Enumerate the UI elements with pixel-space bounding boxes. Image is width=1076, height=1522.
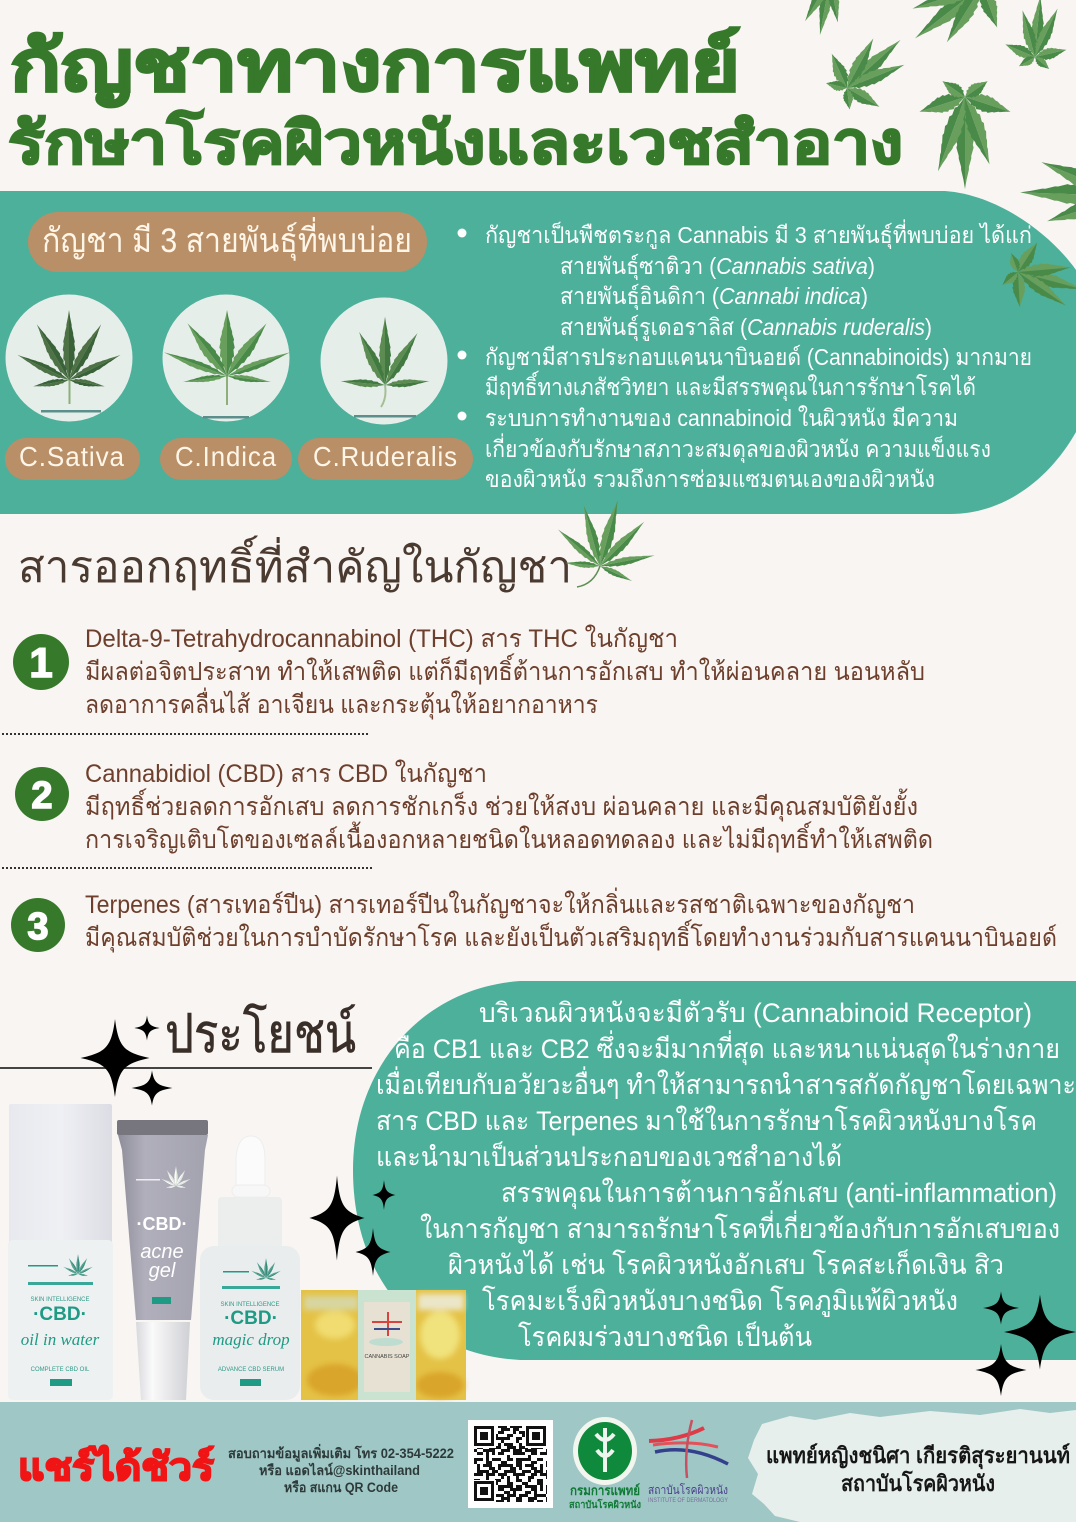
logo: department of medical services [569, 1417, 641, 1511]
product: oil in water bottle: COMPLETE CBD OIL [31, 1367, 90, 1373]
logo: institute of dermatology [648, 1420, 728, 1504]
product: acne gel tube: acne [140, 1241, 184, 1263]
THC text: ลดอาการคลื่นไส้ อาเจียน และกระตุ้นให้อยากอาหาร [85, 687, 598, 720]
product: cannabis soap [301, 1290, 466, 1400]
product: acne gel tube [117, 1120, 208, 1400]
CBD text: Cannabidiol (CBD) สาร CBD ในกัญชา [85, 759, 487, 788]
contact info: หรือ สแกน QR Code [284, 1480, 398, 1495]
bullet list: สายพันธุ์อินดิกา (Cannabi indica) [560, 283, 868, 310]
benefits text: โรคมะเร็งผิวหนังบางชนิด โรคภูมิแพ้ผิวหนัง [482, 1283, 958, 1317]
product: cannabis soap: CANNABIS SOAP [365, 1354, 410, 1360]
leaf on panel [994, 234, 1076, 324]
CBD text: การเจริญเติบโตของเซลล์เนื้องอกหลายชนิดในหลอดทดลอง และไม่มีฤทธิ์ทำให้เสพติด [85, 821, 933, 854]
bullet list: สายพันธุ์ซาติวา (Cannabis sativa) [560, 253, 875, 280]
benefits text: โรคผมร่วงบางชนิด เป็นต้น [518, 1319, 812, 1352]
bullet list: เกี่ยวข้องกับรักษาสภาวะสมดุลของผิวหนัง ความแข็งแรง [485, 433, 991, 463]
sparkles: lower right [976, 1292, 1076, 1396]
author credit [766, 1443, 1070, 1496]
item 3: Terpenes [11, 887, 1057, 953]
benefits text: ผิวหนังได้ เช่น โรคผิวหนังอักเสบ โรคสะเก็ดเงิน สิว [448, 1247, 1004, 1280]
Terpenes text: Terpenes (สารเทอร์ปีน) สารเทอร์ปีนในกัญชาจะให้กลิ่นและรสชาติเฉพาะของกัญชา [85, 887, 915, 919]
product: magic drop bottle [200, 1136, 300, 1400]
product: magic drop bottle: SKIN INTELLIGENCE [220, 1302, 280, 1308]
species: sativa: C.Sativa [19, 441, 125, 472]
product: magic drop bottle: ·CBD· [224, 1308, 278, 1329]
contact info: หรือ แอดไลน์@skinthailand [259, 1462, 420, 1478]
product: oil in water bottle: ·CBD· [33, 1304, 87, 1325]
heading: active compounds: สารออกฤทธิ์ที่สำคัญในกัญชา [18, 535, 572, 592]
CBD text [85, 759, 933, 854]
THC text [85, 624, 925, 720]
number badge 3: 3 [27, 906, 49, 948]
contact info [228, 1443, 454, 1495]
products [8, 1104, 466, 1400]
benefits text: สรรพคุณในการต้านการอักเสบ (anti-inflammation) [501, 1177, 1057, 1210]
species: indica [160, 294, 292, 480]
product: acne gel tube: ·CBD· [136, 1214, 188, 1234]
THC text: Delta-9-Tetrahydrocannabinol (THC) สาร THC ในกัญชา [85, 624, 678, 653]
product: acne gel tube: gel [149, 1260, 176, 1282]
logo: department of medical services: สถาบันโรคผิวหนัง [569, 1498, 641, 1511]
bullet list: กัญชามีสารประกอบแคนนาบินอยด์ (Cannabinoids) มากมาย [485, 344, 1032, 370]
species heading pill: กัญชา มี 3 สายพันธุ์ที่พบบ่อย [42, 217, 412, 261]
species heading pill [28, 212, 427, 272]
benefits panel background [353, 981, 1076, 1360]
panel: benefits text [353, 981, 1076, 1360]
bullet list [458, 219, 1032, 492]
benefits text: และนำมาเป็นส่วนประกอบของเวชสำอางได้ [376, 1139, 842, 1172]
share slogan: แชร์ได้ชัวร์ [18, 1445, 215, 1489]
product: oil in water bottle [8, 1104, 113, 1400]
species: indica: C.Indica [175, 441, 277, 472]
benefits text: บริเวณผิวหนังจะมีตัวรับ (Cannabinoid Receptor) [479, 998, 1032, 1028]
heading: benefits: ประโยชน์ [165, 1003, 356, 1064]
title line 1: กัญชาทางการแพทย์ [10, 27, 740, 108]
brush stroke panel [748, 1409, 1076, 1522]
product: magic drop bottle: ADVANCE CBD SERUM [218, 1367, 284, 1373]
number badge 1: 1 [29, 639, 53, 686]
logo: institute of dermatology: สถาบันโรคผิวหนัง [648, 1483, 728, 1497]
species: sativa [5, 294, 140, 480]
author credit: สถาบันโรคผิวหนัง [841, 1470, 995, 1496]
product: oil in water bottle: SKIN INTELLIGENCE [30, 1297, 90, 1303]
sparkles: middle [309, 1176, 395, 1276]
item 2: CBD [15, 759, 933, 854]
number badge 3 [11, 898, 65, 952]
contact info: สอบถามข้อมูลเพิ่มเติม โทร 02-354-5222 [228, 1443, 454, 1462]
logo: institute of dermatology: INSTITUTE OF DERMATOLOGY [648, 1498, 728, 1504]
bullet list: มีฤทธิ์ทางเภสัชวิทยา และมีสรรพคุณในการรักษาโรคได้ [485, 370, 976, 401]
item 1: THC [13, 624, 925, 720]
footer band [0, 1402, 1076, 1522]
panel: species [0, 191, 1076, 514]
number badge 2: 2 [31, 775, 53, 817]
product: magic drop bottle: magic drop [212, 1330, 290, 1349]
number badge 1 [13, 634, 69, 690]
title line 2: รักษาโรคผิวหนังและเวชสำอาง [8, 108, 903, 176]
bullet list: ของผิวหนัง รวมถึงการซ่อมแซมตนเองของผิวหนัง [485, 466, 935, 492]
QR code [468, 1420, 553, 1508]
benefits text: สาร CBD และ Terpenes มาใช้ในการรักษาโรคผิวหนังบางโรค [376, 1105, 1037, 1136]
benefits text [376, 998, 1076, 1352]
decorative cannabis leaves top right [790, 0, 1076, 252]
bullet list: สายพันธุ์รูเดอราลิส (Cannabis ruderalis) [560, 314, 932, 341]
species: ruderalis: C.Ruderalis [313, 441, 458, 472]
number badge 2 [15, 767, 69, 821]
title [8, 27, 903, 176]
bullet list: ระบบการทำงานของ cannabinoid ในผิวหนัง มีความ [485, 405, 958, 431]
THC text: มีผลต่อจิตประสาท ทำให้เสพติด แต่ก็มีฤทธิ์ต้านการอักเสบ ทำให้ผ่อนคลาย นอนหลับ [85, 653, 925, 686]
CBD text: มีฤทธิ์ช่วยลดการอักเสบ ลดการชักเกร็ง ช่วยให้สงบ ผ่อนคลาย และมีคุณสมบัติยังยั้ง [85, 788, 918, 822]
panel background [0, 191, 1076, 514]
footer [0, 1402, 1076, 1522]
icon: heading leaf [547, 487, 668, 588]
species: ruderalis [298, 298, 473, 480]
logo: department of medical services: กรมการแพทย์ [570, 1483, 640, 1498]
Terpenes text [85, 887, 1057, 953]
product: oil in water bottle: oil in water [21, 1330, 100, 1349]
sparkles: benefits heading [80, 1016, 172, 1106]
bullet list: กัญชาเป็นพืชตระกูล Cannabis มี 3 สายพันธุ์ที่พบบ่อย ได้แก่ [485, 219, 1032, 249]
